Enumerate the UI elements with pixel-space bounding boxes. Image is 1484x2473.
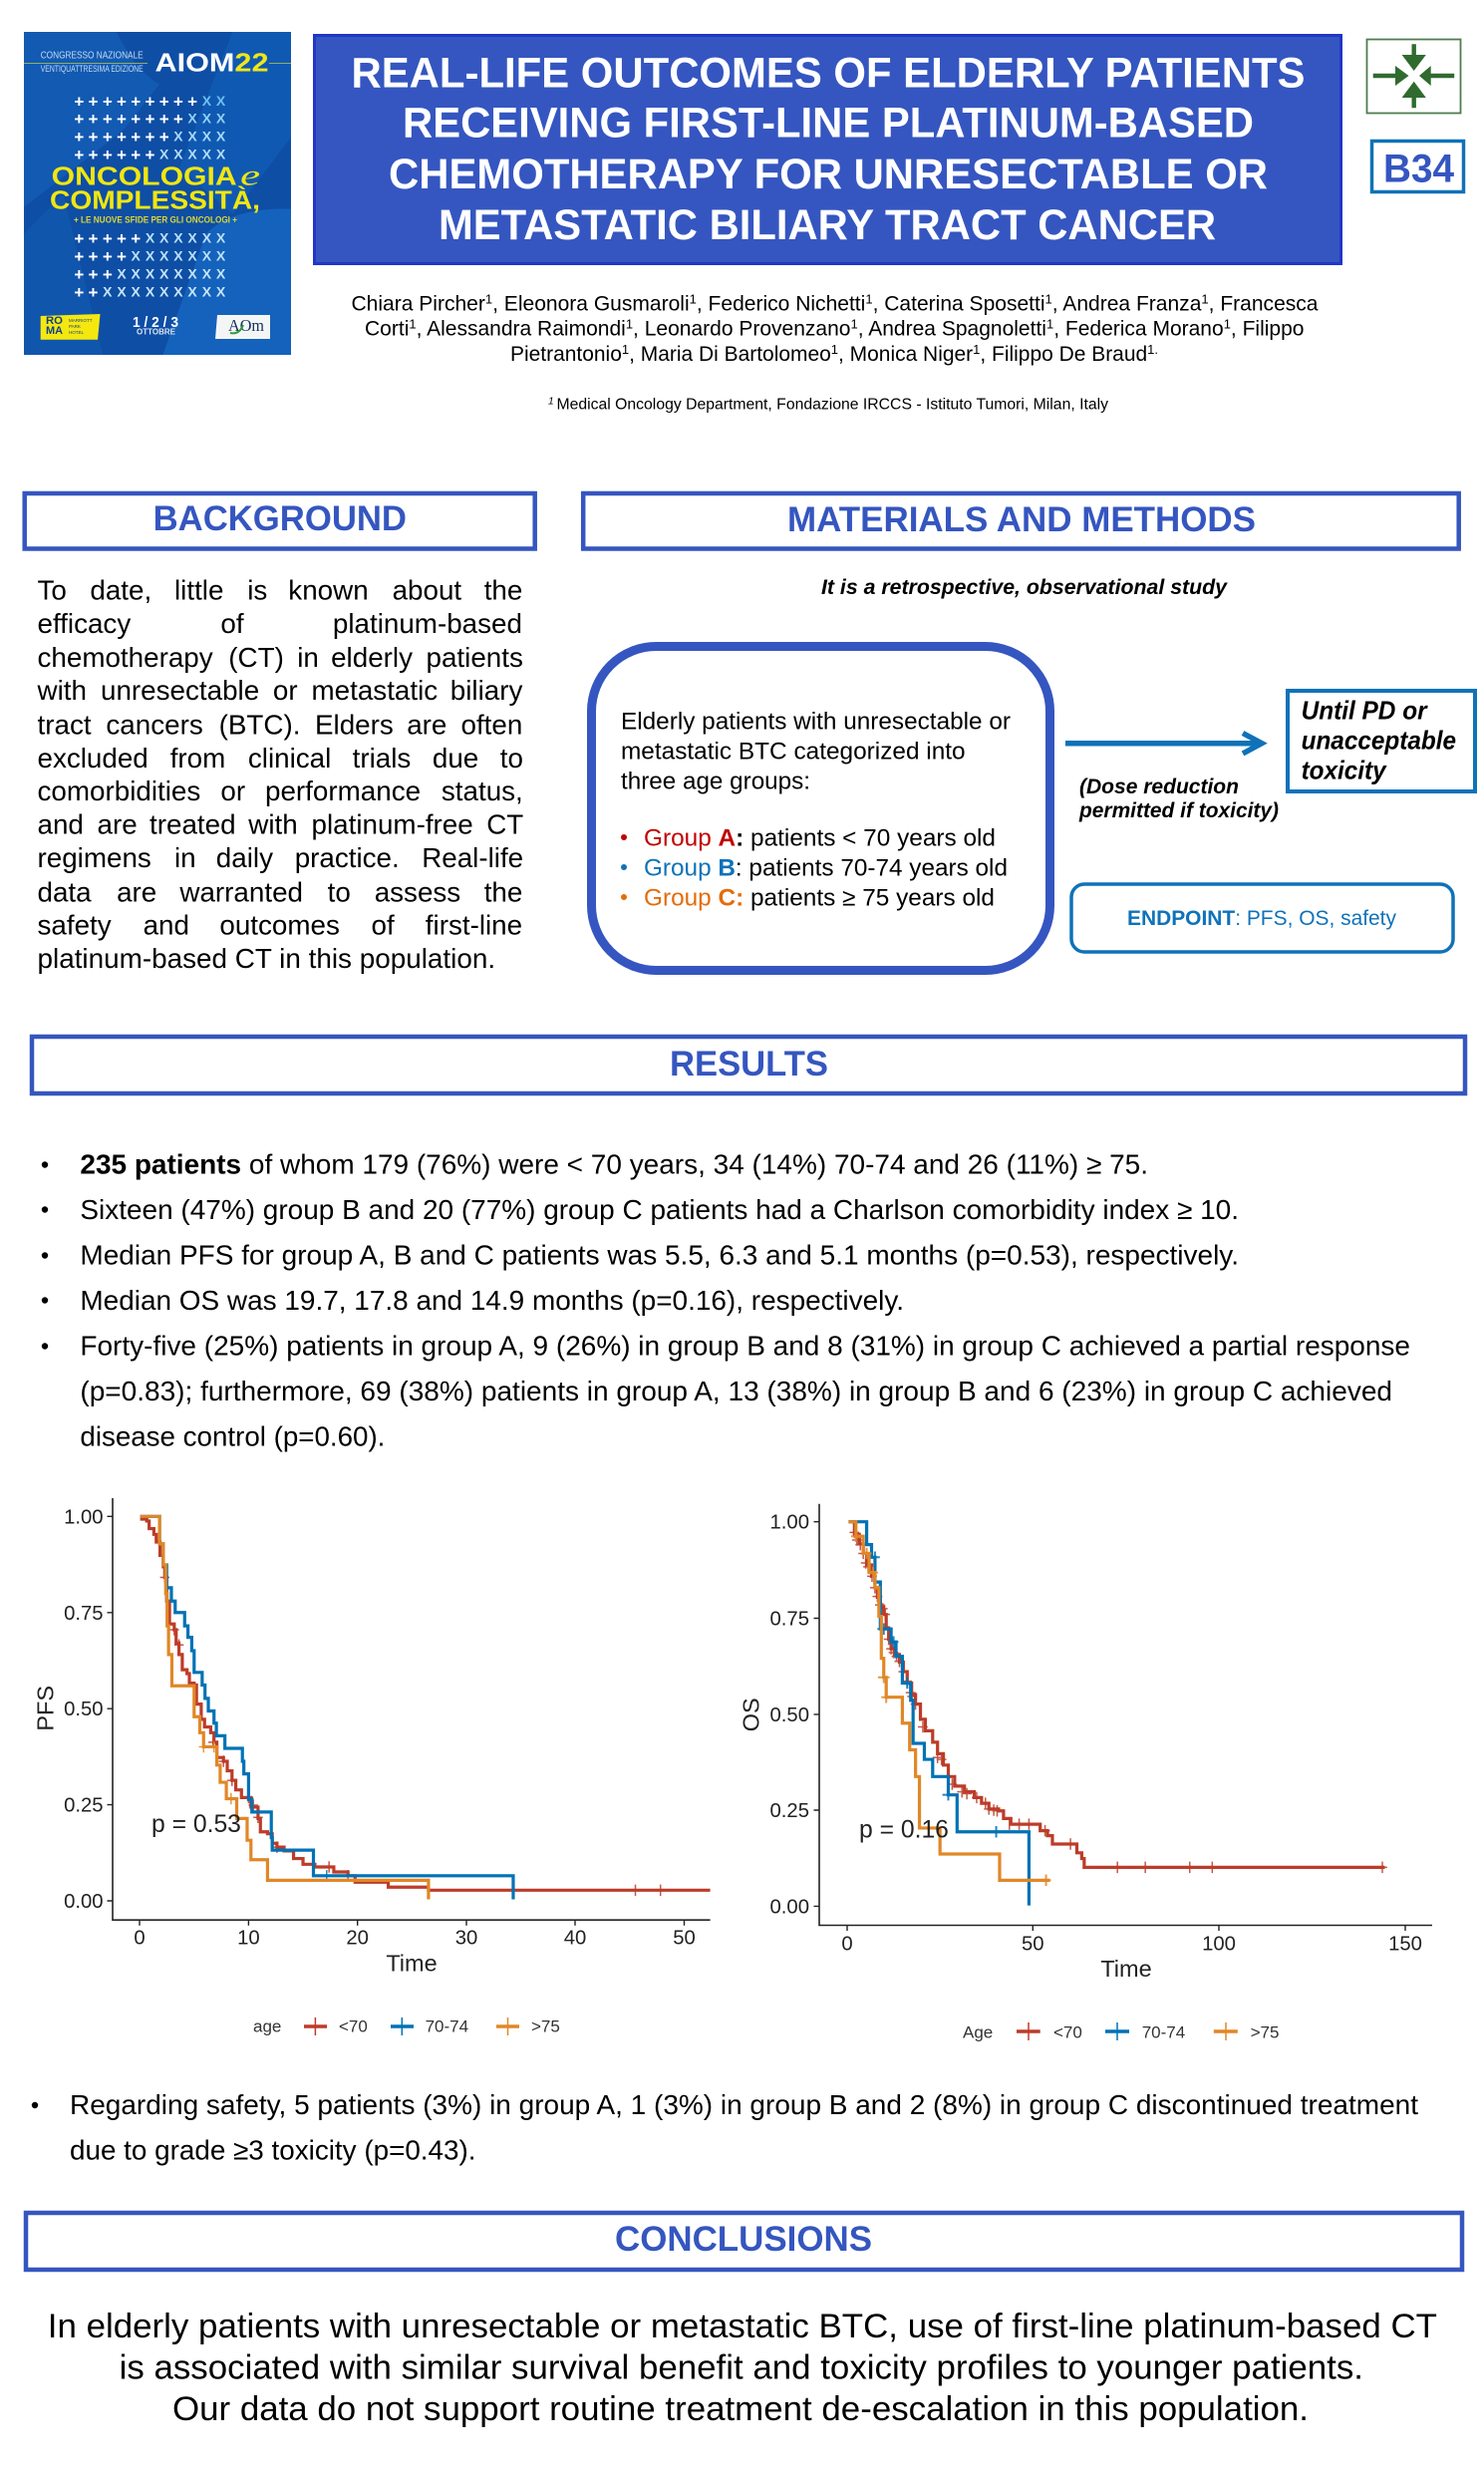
authors: , Federica Morano [1053, 317, 1224, 341]
authors: , Francesca [1209, 293, 1319, 316]
conference poster image: ++++++ [74, 146, 155, 164]
treatment duration box [1288, 691, 1475, 791]
background paragraph: and [144, 909, 189, 941]
conference poster image: XXXXXXXXX [103, 283, 226, 299]
conference poster image: COMPLESSITÀ, [50, 185, 260, 215]
chart: PFS Kaplan-Meier: 0.00 [64, 1891, 104, 1913]
background paragraph: chemotherapy [38, 642, 213, 673]
PFS legend [253, 2017, 560, 2036]
patient groups box: metastatic BTC categorized into [621, 739, 966, 766]
conference poster image: XXXXXXX [132, 247, 226, 263]
background paragraph: with [247, 809, 298, 840]
authors: Chiara Pircher [351, 293, 485, 316]
authors: , Monica Niger [838, 343, 973, 366]
panel: materials and methods [583, 493, 1475, 971]
conference poster image: VENTIQUATTRESIMA EDIZIONE [41, 64, 144, 74]
poster code badge B34 [1371, 142, 1463, 191]
chart: OS Kaplan-Meier: 0 [841, 1933, 853, 1955]
authors: , Eleonora Gusmaroli [492, 293, 690, 316]
background paragraph: with [36, 675, 87, 706]
endpoint box: ENDPOINT: PFS, OS, safety [1127, 906, 1396, 930]
background paragraph: patients [427, 642, 523, 673]
background paragraph [36, 575, 523, 974]
conclusions text [48, 2308, 1437, 2428]
background paragraph: to [500, 743, 523, 773]
authors: , Filippo De Braud [980, 343, 1147, 366]
authors: , Andrea Spagnoletti [858, 317, 1046, 341]
background paragraph: clinical [248, 743, 331, 773]
authors: Pietrantonio [510, 343, 622, 366]
conclusions text: In elderly patients with unresectable or metastatic BTC, use of first-line platinum-based CT [48, 2308, 1437, 2345]
conclusions text: Our data do not support routine treatment de-escalation in this population. [172, 2390, 1309, 2428]
PFS p-value: p = 0.53 [151, 1811, 241, 1838]
chart: PFS Kaplan-Meier: 40 [564, 1928, 586, 1950]
chart: PFS Kaplan-Meier: 50 [673, 1928, 696, 1950]
background paragraph: biliary [450, 675, 523, 706]
authors: 1 [622, 342, 629, 357]
conference poster image: + LE NUOVE SFIDE PER GLI ONCOLOGI + [74, 214, 237, 225]
conference poster image: AOm [228, 316, 264, 335]
background paragraph: warranted [178, 877, 303, 907]
chart: PFS Kaplan-Meier: 20 [346, 1928, 369, 1950]
dose reduction note: (Dose reduction [1079, 775, 1239, 798]
conference poster image: ONCOLOGIA [52, 161, 237, 191]
conference poster image: +++++ [74, 229, 141, 248]
background paragraph: platinum-free [311, 809, 473, 840]
authors [351, 292, 1319, 366]
conference poster image: +++++++++ [74, 92, 197, 112]
background paragraph: from [170, 743, 225, 773]
authors: , Andrea Franza [1052, 293, 1202, 316]
conference poster image: +++++++ [74, 128, 169, 147]
chart: PFS Kaplan-Meier: Time [386, 1950, 438, 1976]
background paragraph: are [407, 710, 446, 740]
affiliation: 1 [548, 397, 556, 408]
conference poster image: ++++ [74, 247, 127, 266]
background paragraph: are [117, 877, 156, 907]
chart: OS Kaplan-Meier: 100 [1202, 1933, 1236, 1955]
background paragraph: about [393, 575, 461, 606]
chart: PFS Kaplan-Meier: 0 [134, 1928, 146, 1950]
authors: 1 [1224, 317, 1231, 331]
panel: background [25, 493, 535, 974]
authors: 1 [1046, 317, 1053, 331]
background paragraph: due [433, 743, 478, 773]
background paragraph: first-line [426, 909, 522, 941]
patient groups box: Group A: patients < 70 years old [644, 824, 996, 851]
dose reduction note: permitted if toxicity) [1078, 799, 1279, 822]
authors: 1 [850, 317, 858, 331]
authors: 1 [1201, 292, 1209, 307]
background paragraph: practice. [295, 842, 400, 873]
results bullets: Median OS was 19.7, 17.8 and 14.9 months (p=0.16), respectively. [80, 1285, 904, 1316]
background paragraph: is [247, 575, 267, 606]
methods heading [583, 493, 1459, 548]
conference poster image: MA [46, 325, 63, 337]
authors: , Federico Nichetti [697, 293, 865, 316]
affiliation: Medical Oncology Department, Fondazione IRCCS - Istituto Tumori, Milan, Italy [556, 397, 1108, 414]
background paragraph: to [328, 877, 351, 907]
background paragraph: cancers [106, 710, 203, 740]
chart: OS Kaplan-Meier: 0.75 [770, 1609, 809, 1631]
patient groups box: Elderly patients with unresectable or [621, 709, 1011, 736]
authors: , Alessandra Raimondi [417, 317, 626, 341]
background paragraph: status, [442, 775, 523, 806]
chart: PFS Kaplan-Meier: 0.75 [64, 1603, 104, 1625]
treatment duration box: Until PD or [1302, 696, 1428, 726]
conference poster image: AIOM 22 [155, 47, 269, 77]
background paragraph: or [220, 775, 245, 806]
OS legend [963, 2022, 1279, 2041]
background paragraph: unresectable [101, 675, 259, 706]
chart: PFS Kaplan-Meier: 0.50 [64, 1699, 104, 1720]
background paragraph: platinum-based [333, 608, 522, 639]
chart: PFS Kaplan-Meier: 30 [455, 1928, 477, 1950]
chart: OS Kaplan-Meier: 0.00 [770, 1896, 809, 1918]
authors: , Leonardo Provenzano [633, 317, 850, 341]
authors: 1 [1045, 292, 1052, 307]
chart: PFS Kaplan-Meier: 10 [237, 1928, 260, 1950]
results bullets: Forty-five (25%) patients in group A, 9 (26%) in group B and 8 (31%) in group C achieved a partial response [80, 1331, 1410, 1362]
conference poster image: CONGRESSO NAZIONALE [41, 51, 144, 62]
conference poster image: +++ [74, 265, 113, 284]
authors: , Filippo [1231, 317, 1304, 341]
conference poster image: ++ [74, 283, 99, 302]
chart: OS Kaplan-Meier: OS [739, 1698, 764, 1731]
background heading: BACKGROUND [153, 499, 407, 538]
chart: PFS Kaplan-Meier: PFS [33, 1686, 59, 1731]
background paragraph: of [220, 608, 244, 639]
background paragraph: assess [375, 877, 460, 907]
background paragraph: (CT) [228, 642, 284, 673]
conference poster image: RO [46, 315, 63, 327]
results bullets: 235 patients of whom 179 (76%) were < 70 years, 34 (14%) 70-74 and 26 (11%) ≥ 75. [80, 1149, 1148, 1180]
study type note: It is a retrospective, observational study [821, 576, 1228, 599]
dose reduction note [1078, 775, 1279, 822]
authors: , Maria Di Bartolomeo [629, 343, 831, 366]
PFS legend: <70 [339, 2017, 368, 2036]
conference poster image [24, 32, 291, 355]
authors: 1 [865, 292, 873, 307]
background paragraph: efficacy [38, 608, 131, 639]
conference poster image: e [240, 159, 260, 191]
chart: OS Kaplan-Meier: 0.50 [770, 1704, 809, 1726]
background paragraph: comorbidities [38, 775, 200, 806]
OS legend: >75 [1251, 2022, 1279, 2041]
OS legend: Age [963, 2022, 993, 2041]
OS legend: 70-74 [1142, 2022, 1185, 2041]
background paragraph: (BTC). [219, 710, 300, 740]
authors: Corti [365, 317, 409, 341]
chart: PFS Kaplan-Meier [33, 1498, 711, 2036]
OS p-value: p = 0.16 [859, 1816, 949, 1844]
icon: green inward arrows logo [1367, 40, 1461, 114]
conference poster image: 1 / 2 / 3 [133, 314, 178, 331]
title banner [315, 36, 1341, 263]
chart: OS Kaplan-Meier: 0.25 [770, 1800, 809, 1822]
conference poster image: XX [202, 93, 226, 109]
background paragraph: known [288, 575, 369, 606]
safety bullet: Regarding safety, 5 patients (3%) in group A, 1 (3%) in group B and 2 (8%) in group C discontinued treatment [70, 2089, 1418, 2120]
treatment duration box: unacceptable [1302, 726, 1456, 756]
conference poster image: XXXXXX [146, 230, 226, 246]
background paragraph: Elders [315, 710, 394, 740]
panel: results [32, 1037, 1465, 1452]
background paragraph: platinum-based CT in this population. [38, 943, 495, 974]
background paragraph: regimens [38, 842, 151, 873]
background paragraph: metastatic [311, 675, 438, 706]
background paragraph: elderly [331, 642, 413, 673]
patient groups box: three age groups: [621, 769, 810, 795]
title banner: RECEIVING FIRST-LINE PLATINUM-BASED [403, 100, 1254, 148]
background paragraph: outcomes [219, 909, 340, 941]
background paragraph: daily [216, 842, 273, 873]
background paragraph: excluded [38, 743, 148, 773]
arrow [1065, 734, 1262, 754]
chart: OS Kaplan-Meier: Time [1100, 1956, 1152, 1982]
authors: 1 [626, 317, 633, 331]
patient groups box: Group B: patients 70-74 years old [644, 854, 1008, 881]
results bullets: (p=0.83); furthermore, 69 (38%) patients in group A, 13 (38%) in group B and 6 (23%) in group C achieved [80, 1376, 1392, 1406]
conference poster image: OTTOBRE [137, 327, 176, 337]
conclusions heading: CONCLUSIONS [615, 2220, 872, 2259]
background paragraph: the [484, 877, 522, 907]
background paragraph: in [297, 642, 319, 673]
title banner: METASTATIC BILIARY TRACT CANCER [439, 201, 1216, 249]
authors: 1 [973, 342, 980, 357]
treatment duration box: toxicity [1302, 756, 1387, 785]
authors: 1. [1147, 342, 1158, 357]
background paragraph: in [174, 842, 196, 873]
background paragraph: treated [149, 809, 236, 840]
chart: OS Kaplan-Meier [739, 1504, 1432, 2041]
conference poster image: XXX [187, 111, 226, 127]
chart: OS Kaplan-Meier: 150 [1388, 1933, 1422, 1955]
background paragraph: CT [486, 809, 523, 840]
background paragraph: trials [353, 743, 411, 773]
background heading [25, 493, 535, 548]
results bullets [42, 1149, 1410, 1452]
conference poster image: XXXXXXXX [117, 265, 226, 281]
safety bullet: due to grade ≥3 toxicity (p=0.43). [70, 2135, 475, 2166]
panel: conclusions [26, 2213, 1462, 2428]
patient groups box: Group C: patients ≥ 75 years old [644, 884, 995, 911]
conference poster image: XXXX [173, 128, 226, 144]
authors: 1 [690, 292, 697, 307]
title banner: CHEMOTHERAPY FOR UNRESECTABLE OR [389, 151, 1268, 198]
background paragraph: performance [265, 775, 421, 806]
background paragraph: are [98, 809, 138, 840]
conference poster image: HOTEL [69, 330, 85, 335]
conference poster image: PARK [69, 324, 81, 329]
authors: 1 [485, 292, 492, 307]
methods heading: MATERIALS AND METHODS [787, 500, 1256, 539]
chart: OS Kaplan-Meier: 1.00 [770, 1512, 809, 1534]
patient groups box [592, 646, 1050, 971]
chart: PFS Kaplan-Meier: 0.25 [64, 1795, 104, 1817]
background paragraph: and [38, 809, 84, 840]
endpoint box [1071, 884, 1453, 952]
chart: OS Kaplan-Meier: 50 [1022, 1933, 1044, 1955]
background paragraph: the [484, 575, 522, 606]
background paragraph: of [371, 909, 395, 941]
authors: 1 [409, 317, 417, 331]
PFS legend: >75 [531, 2017, 560, 2036]
background paragraph: often [460, 710, 522, 740]
background paragraph: safety [38, 909, 112, 941]
results bullets: disease control (p=0.60). [80, 1421, 385, 1452]
results heading: RESULTS [670, 1045, 828, 1083]
PFS legend: 70-74 [426, 2017, 468, 2036]
conference poster image: MARRIOTT [69, 318, 93, 323]
OS legend: <70 [1053, 2022, 1082, 2041]
safety bullet [32, 2089, 1418, 2166]
chart: PFS Kaplan-Meier: 1.00 [64, 1506, 104, 1528]
title banner: REAL-LIFE OUTCOMES OF ELDERLY PATIENTS [351, 49, 1306, 97]
background paragraph: or [273, 675, 298, 706]
background paragraph: date, [90, 575, 151, 606]
background paragraph: little [174, 575, 223, 606]
conclusions text: is associated with similar survival benefit and toxicity profiles to younger patients. [120, 2349, 1363, 2387]
results bullets: Median PFS for group A, B and C patients was 5.5, 6.3 and 5.1 months (p=0.53), respectively. [80, 1240, 1239, 1271]
authors: 1 [831, 342, 838, 357]
poster code badge B34: B34 [1383, 148, 1455, 191]
background paragraph: Real-life [422, 842, 523, 873]
authors: , Caterina Sposetti [873, 293, 1045, 316]
background paragraph: data [38, 877, 92, 907]
background paragraph: To [38, 575, 67, 606]
PFS legend: age [253, 2017, 281, 2036]
background paragraph: tract [38, 710, 92, 740]
results bullets: Sixteen (47%) group B and 20 (77%) group C patients had a Charlson comorbidity index ≥ 10. [80, 1194, 1239, 1225]
results heading [32, 1037, 1465, 1093]
conclusions heading [26, 2213, 1462, 2270]
conference poster image: XXXXX [159, 146, 226, 161]
conference poster image: ++++++++ [74, 110, 183, 129]
